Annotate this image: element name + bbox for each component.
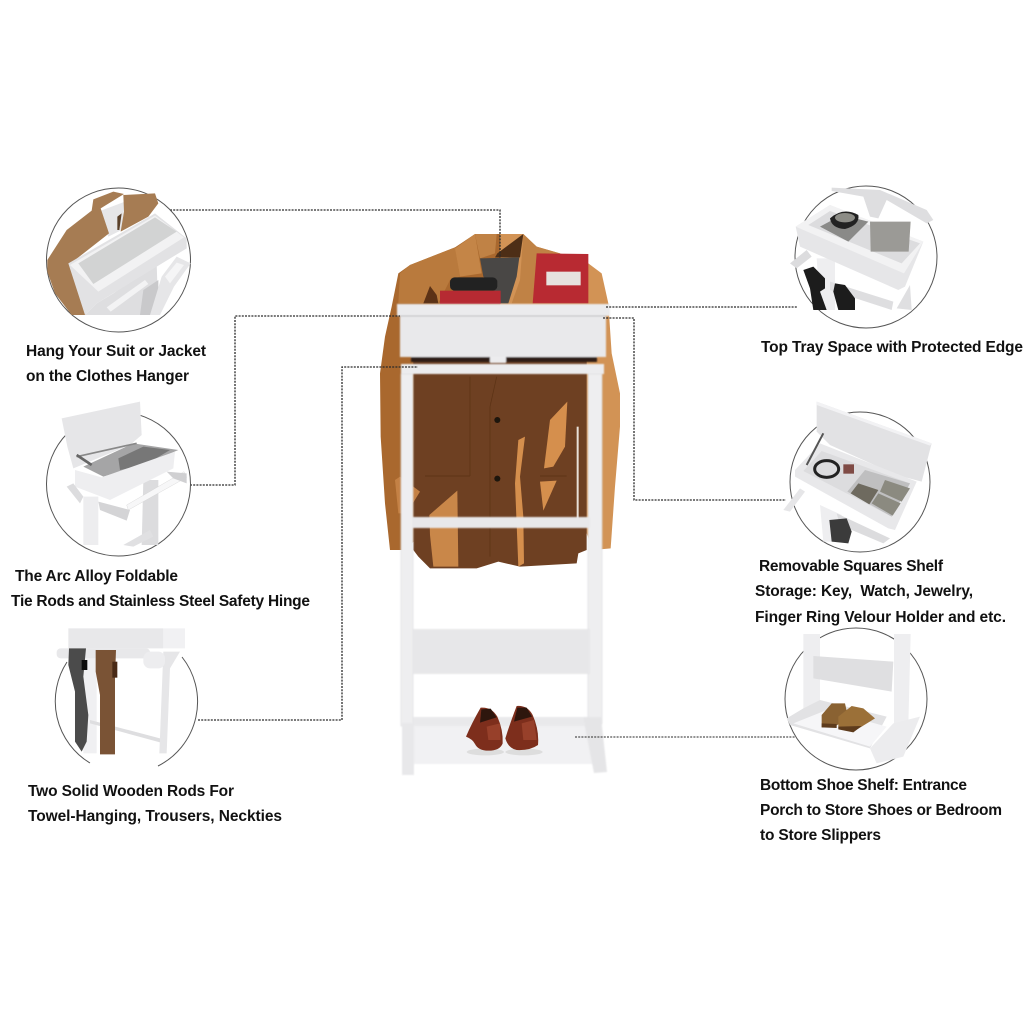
circle outline [795, 186, 937, 328]
label: wooden rods: Two Solid Wooden Rods For [28, 783, 234, 800]
label: hinge [11, 568, 310, 610]
thumbnail: open storage box [783, 402, 932, 543]
leader line: hanger [170, 210, 500, 258]
label: storage [755, 558, 1006, 626]
label: clothes hanger [26, 343, 206, 385]
label: shoe shelf: Bottom Shoe Shelf: Entrance [760, 777, 967, 794]
label: clothes hanger: on the Clothes Hanger [26, 368, 189, 385]
label: hinge: Tie Rods and Stainless Steel Safety Hinge [11, 593, 310, 610]
label: wooden rods: Towel-Hanging, Trousers, Neckties [28, 808, 282, 825]
circle outline [785, 628, 927, 770]
label: storage: Removable Squares Shelf [759, 558, 944, 575]
callout: wooden rods detail [55, 628, 198, 766]
leader line: hinge [190, 316, 400, 485]
circle outline [46, 412, 190, 556]
leader line: shoe shelf [575, 736, 795, 738]
label: shoe shelf [760, 777, 1002, 844]
thumbnail: ties on rods [57, 628, 185, 754]
label: shoe shelf: Porch to Store Shoes or Bedroom [760, 802, 1002, 819]
thumbnail: open lid and tie rods [62, 402, 187, 547]
callout: storage detail [783, 402, 932, 552]
label: hinge: The Arc Alloy Foldable [15, 568, 178, 585]
label: shoe shelf: to Store Slippers [760, 827, 881, 844]
callout: hinge detail [46, 402, 190, 556]
leader line: rods [198, 367, 418, 720]
stand frame [397, 304, 610, 775]
circle outline [46, 188, 190, 332]
callout: top tray detail [790, 186, 937, 328]
callout: clothes hanger detail [46, 188, 191, 332]
label: wooden rods [28, 783, 282, 825]
thumbnail: shoes on shelf [787, 634, 920, 763]
leader line: top tray [606, 306, 797, 308]
thumbnail: tray with items [790, 188, 933, 310]
shoes [466, 706, 543, 755]
label: storage: Finger Ring Velour Holder and etc. [755, 609, 1006, 626]
illustration: valet stand with jacket [380, 234, 620, 775]
thumbnail: jacket on hanger [47, 192, 191, 315]
boxes on tray [440, 253, 588, 304]
jacket [380, 234, 620, 568]
label: clothes hanger: Hang Your Suit or Jacket [26, 343, 206, 360]
leader line: storage [603, 318, 786, 500]
label: storage: Storage: Key, Watch, Jewelry, [755, 583, 973, 600]
circle outline [55, 657, 198, 766]
circle outline [790, 412, 930, 552]
label: top tray: Top Tray Space with Protected Edge [761, 339, 1023, 356]
callout: shoe shelf detail [785, 628, 927, 770]
